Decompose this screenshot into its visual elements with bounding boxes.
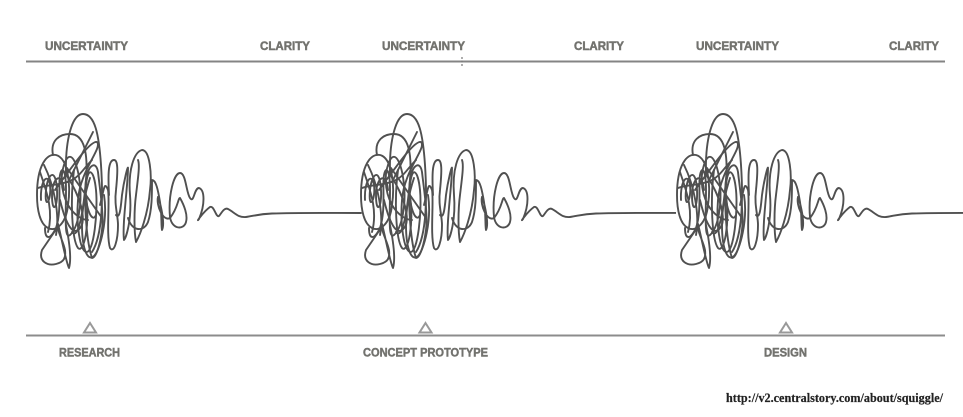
header labels: CLARITY — [574, 41, 624, 53]
squiggle: concept prototype — [361, 114, 685, 268]
header labels — [45, 41, 939, 53]
triangle marker: research — [84, 323, 96, 332]
stage label: design: DESIGN — [764, 348, 807, 360]
header labels: CLARITY — [260, 41, 310, 53]
triangle marker: design — [780, 323, 792, 332]
small dotted tick — [461, 57, 463, 66]
stage label: research: RESEARCH — [59, 348, 120, 360]
header labels: UNCERTAINTY — [382, 41, 465, 53]
header labels: UNCERTAINTY — [45, 41, 128, 53]
squiggle: design — [677, 114, 963, 268]
source url: http://v2.centralstory.com/about/squiggle/ — [726, 391, 944, 405]
squiggle: research — [37, 114, 361, 268]
header labels: CLARITY — [889, 41, 939, 53]
header labels: UNCERTAINTY — [696, 41, 779, 53]
top axis line — [26, 60, 945, 62]
triangle marker: concept prototype — [420, 323, 432, 332]
stage label: concept prototype: CONCEPT PROTOTYPE — [363, 348, 488, 360]
bottom axis line — [26, 334, 945, 336]
